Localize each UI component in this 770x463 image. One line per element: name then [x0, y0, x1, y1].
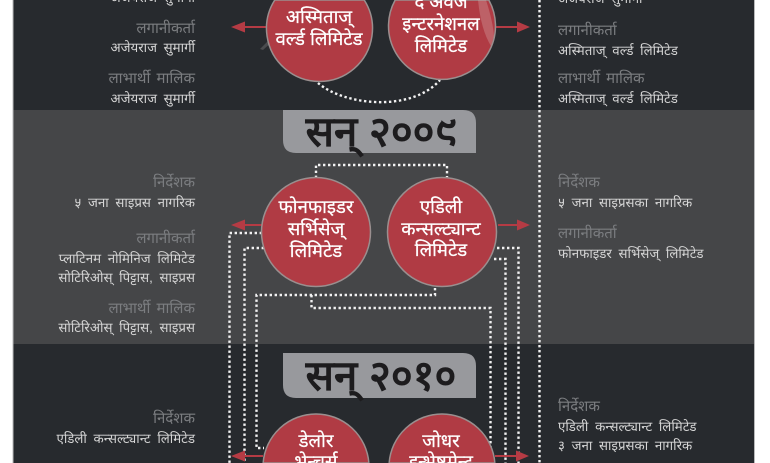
text block: Fonfinder details (left): सोटिरिओस् पिट्टास, साइप्रस	[58, 270, 196, 286]
circle: The Avaj International Limited	[388, 0, 495, 79]
circle: The Avaj International Limited: इन्टरनेशनल	[402, 13, 480, 34]
text block: ADL details (right): फोनफाइडर सर्भिसेज् लिमिटेड	[558, 246, 704, 262]
dotted connector lines	[230, 0, 540, 463]
text block: Fonfinder details (left): प्लाटिनम नोमिनिज लिमिटेड	[59, 251, 196, 266]
text block: The Avaj details (right)	[558, 0, 679, 107]
decorative streak near Asmita circle	[260, 37, 274, 50]
arrow: Asmita left	[231, 22, 266, 32]
circle: Asmita World Limited	[266, 0, 373, 81]
circle: The Avaj International Limited: लिमिटेड	[415, 35, 468, 56]
text block: Johar details (right): ३ जना साइप्रसका नागरिक	[558, 438, 693, 453]
text block: Johar details (right): एडिली कन्सल्ट्यान्ट लिमिटेड	[558, 419, 697, 434]
year label: 2009: सन् २००९	[305, 108, 457, 158]
text block: The Avaj details (right): अस्मिताज् वर्ल्ड लिमिटेड	[558, 91, 679, 107]
circle: Johar Investment	[389, 414, 495, 463]
text block: Deloer details (left): निर्देशक	[153, 409, 195, 427]
text block: ADL details (right): ५ जना साइप्रसका नागरिक	[558, 195, 693, 210]
arrow: The Avaj right	[495, 22, 530, 32]
circle: Fonfinder Services Limited: सर्भिसेज्	[288, 218, 347, 240]
text block: Johar details (right): निर्देशक	[558, 397, 600, 415]
circle: ADL Consultant Limited	[388, 178, 496, 286]
arrow: Johar right	[495, 450, 529, 462]
text block: Fonfinder details (left): सोटिरिओस् पिट्टास, साइप्रस	[58, 320, 196, 336]
circle: Asmita World Limited: वर्ल्ड लिमिटेड	[276, 28, 364, 49]
text block: Fonfinder details (left): लगानीकर्ता	[136, 229, 196, 247]
text block: Asmita details (left): लाभार्थी मालिक	[108, 69, 195, 87]
text block: The Avaj details (right): लाभार्थी मालिक	[558, 69, 645, 87]
text block: Fonfinder details (left): ५ जना साइप्रस नागरिक	[74, 195, 196, 210]
arrow: ADL right	[498, 220, 530, 230]
text block: The Avaj details (right): लगानीकर्ता	[558, 21, 618, 39]
arrow: Fonfinder left	[231, 220, 262, 230]
text block: Johar details (right)	[558, 397, 697, 453]
circle: Asmita World Limited: अस्मिताज्	[286, 6, 355, 28]
text block: ADL details (right)	[558, 173, 704, 262]
text block: Deloer details (left): एडिली कन्सल्ट्यान्ट लिमिटेड	[56, 431, 196, 446]
circle: ADL Consultant Limited: कन्सल्ट्यान्ट	[401, 218, 481, 239]
year label: 2010: सन् २०१०	[305, 352, 456, 402]
circle: ADL Consultant Limited: लिमिटेड	[415, 239, 468, 260]
text block: ADL details (right): लगानीकर्ता	[558, 224, 618, 242]
circle: Fonfinder Services Limited: लिमिटेड	[290, 240, 343, 261]
text block: Asmita details (left): अजेयराज सुमार्गी	[110, 91, 196, 107]
text block: Asmita details (left): अजेयराज सुमार्गी	[110, 40, 196, 56]
circle: Deloer Ventures: डेलोर	[298, 430, 334, 451]
circle: ADL Consultant Limited: एडिली	[420, 196, 463, 217]
circle: Johar Investment: जोधर	[422, 430, 460, 451]
text block: Asmita details (left): लगानीकर्ता	[136, 19, 196, 37]
circle: Deloer Ventures	[263, 414, 369, 463]
text block: Fonfinder details (left)	[58, 173, 196, 336]
text block: ADL details (right): निर्देशक	[558, 173, 600, 191]
text block: The Avaj details (right): अस्मिताज् वर्ल्ड लिमिटेड	[558, 43, 679, 59]
text block: Fonfinder details (left): लाभार्थी मालिक	[108, 299, 195, 317]
text block: Fonfinder details (left): निर्देशक	[153, 173, 195, 191]
circle: Fonfinder Services Limited: फोनफाइडर	[279, 196, 354, 217]
text block: Deloer details (left)	[56, 409, 196, 446]
arrow: Deloer left	[231, 450, 263, 462]
text block: Asmita details (left)	[108, 0, 196, 107]
circle: Fonfinder Services Limited	[262, 178, 370, 286]
